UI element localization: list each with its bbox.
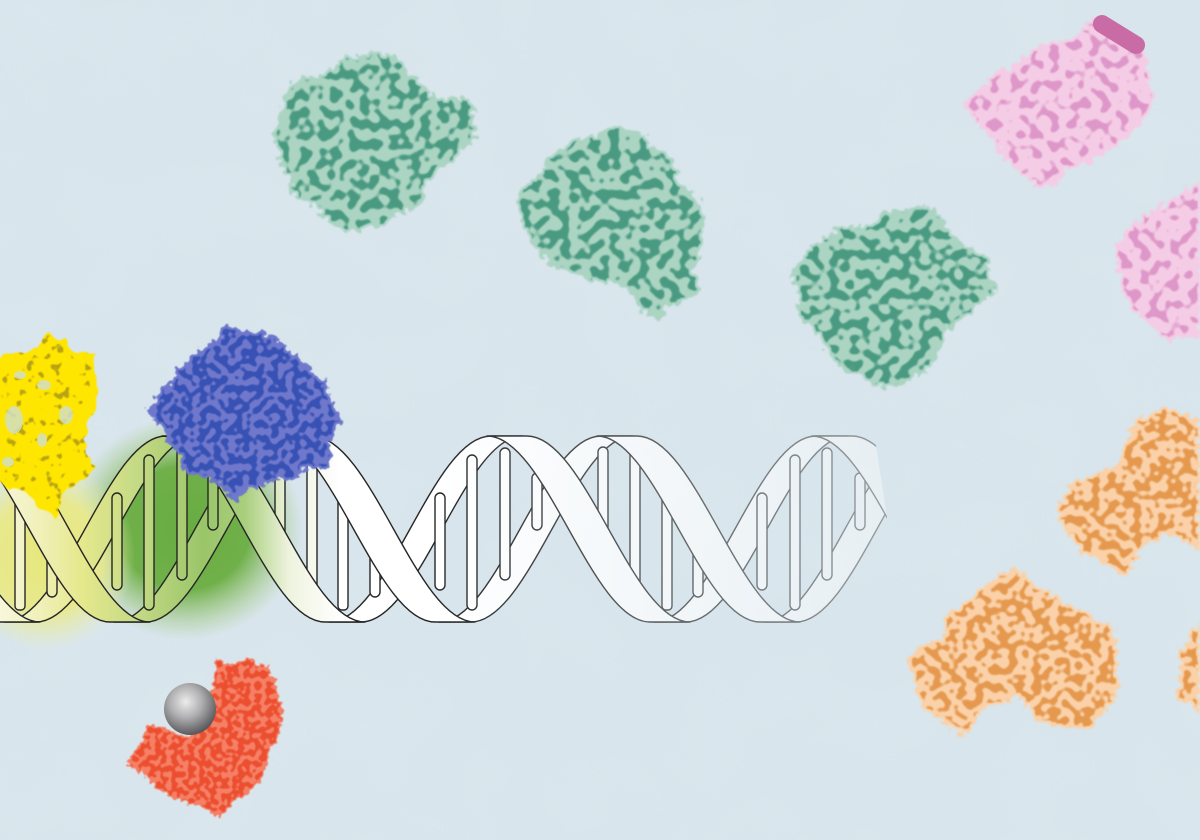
protein: green 2 [516, 128, 706, 320]
back ribbons [4, 436, 958, 622]
front ribbons [0, 435, 887, 623]
green highlight region [67, 416, 303, 640]
yellow protein gaps [2, 371, 73, 467]
protein: orange 2 [906, 568, 1122, 734]
pink protein cap [1102, 24, 1136, 45]
base pair rungs [15, 447, 865, 610]
protein: blue on DNA [146, 326, 340, 498]
protein: yellow [0, 332, 98, 520]
grey sphere ligand [164, 683, 216, 735]
protein: green 3 [794, 203, 998, 384]
protein: orange 1 [1056, 405, 1200, 572]
protein: red [126, 660, 284, 816]
protein: green 1 [272, 54, 474, 233]
protein: pink 1 [964, 22, 1152, 190]
protein: orange 3 [1176, 612, 1200, 722]
protein: pink 2 [1112, 186, 1200, 342]
yellow highlight region [0, 460, 135, 650]
DNA double helix [0, 435, 887, 623]
